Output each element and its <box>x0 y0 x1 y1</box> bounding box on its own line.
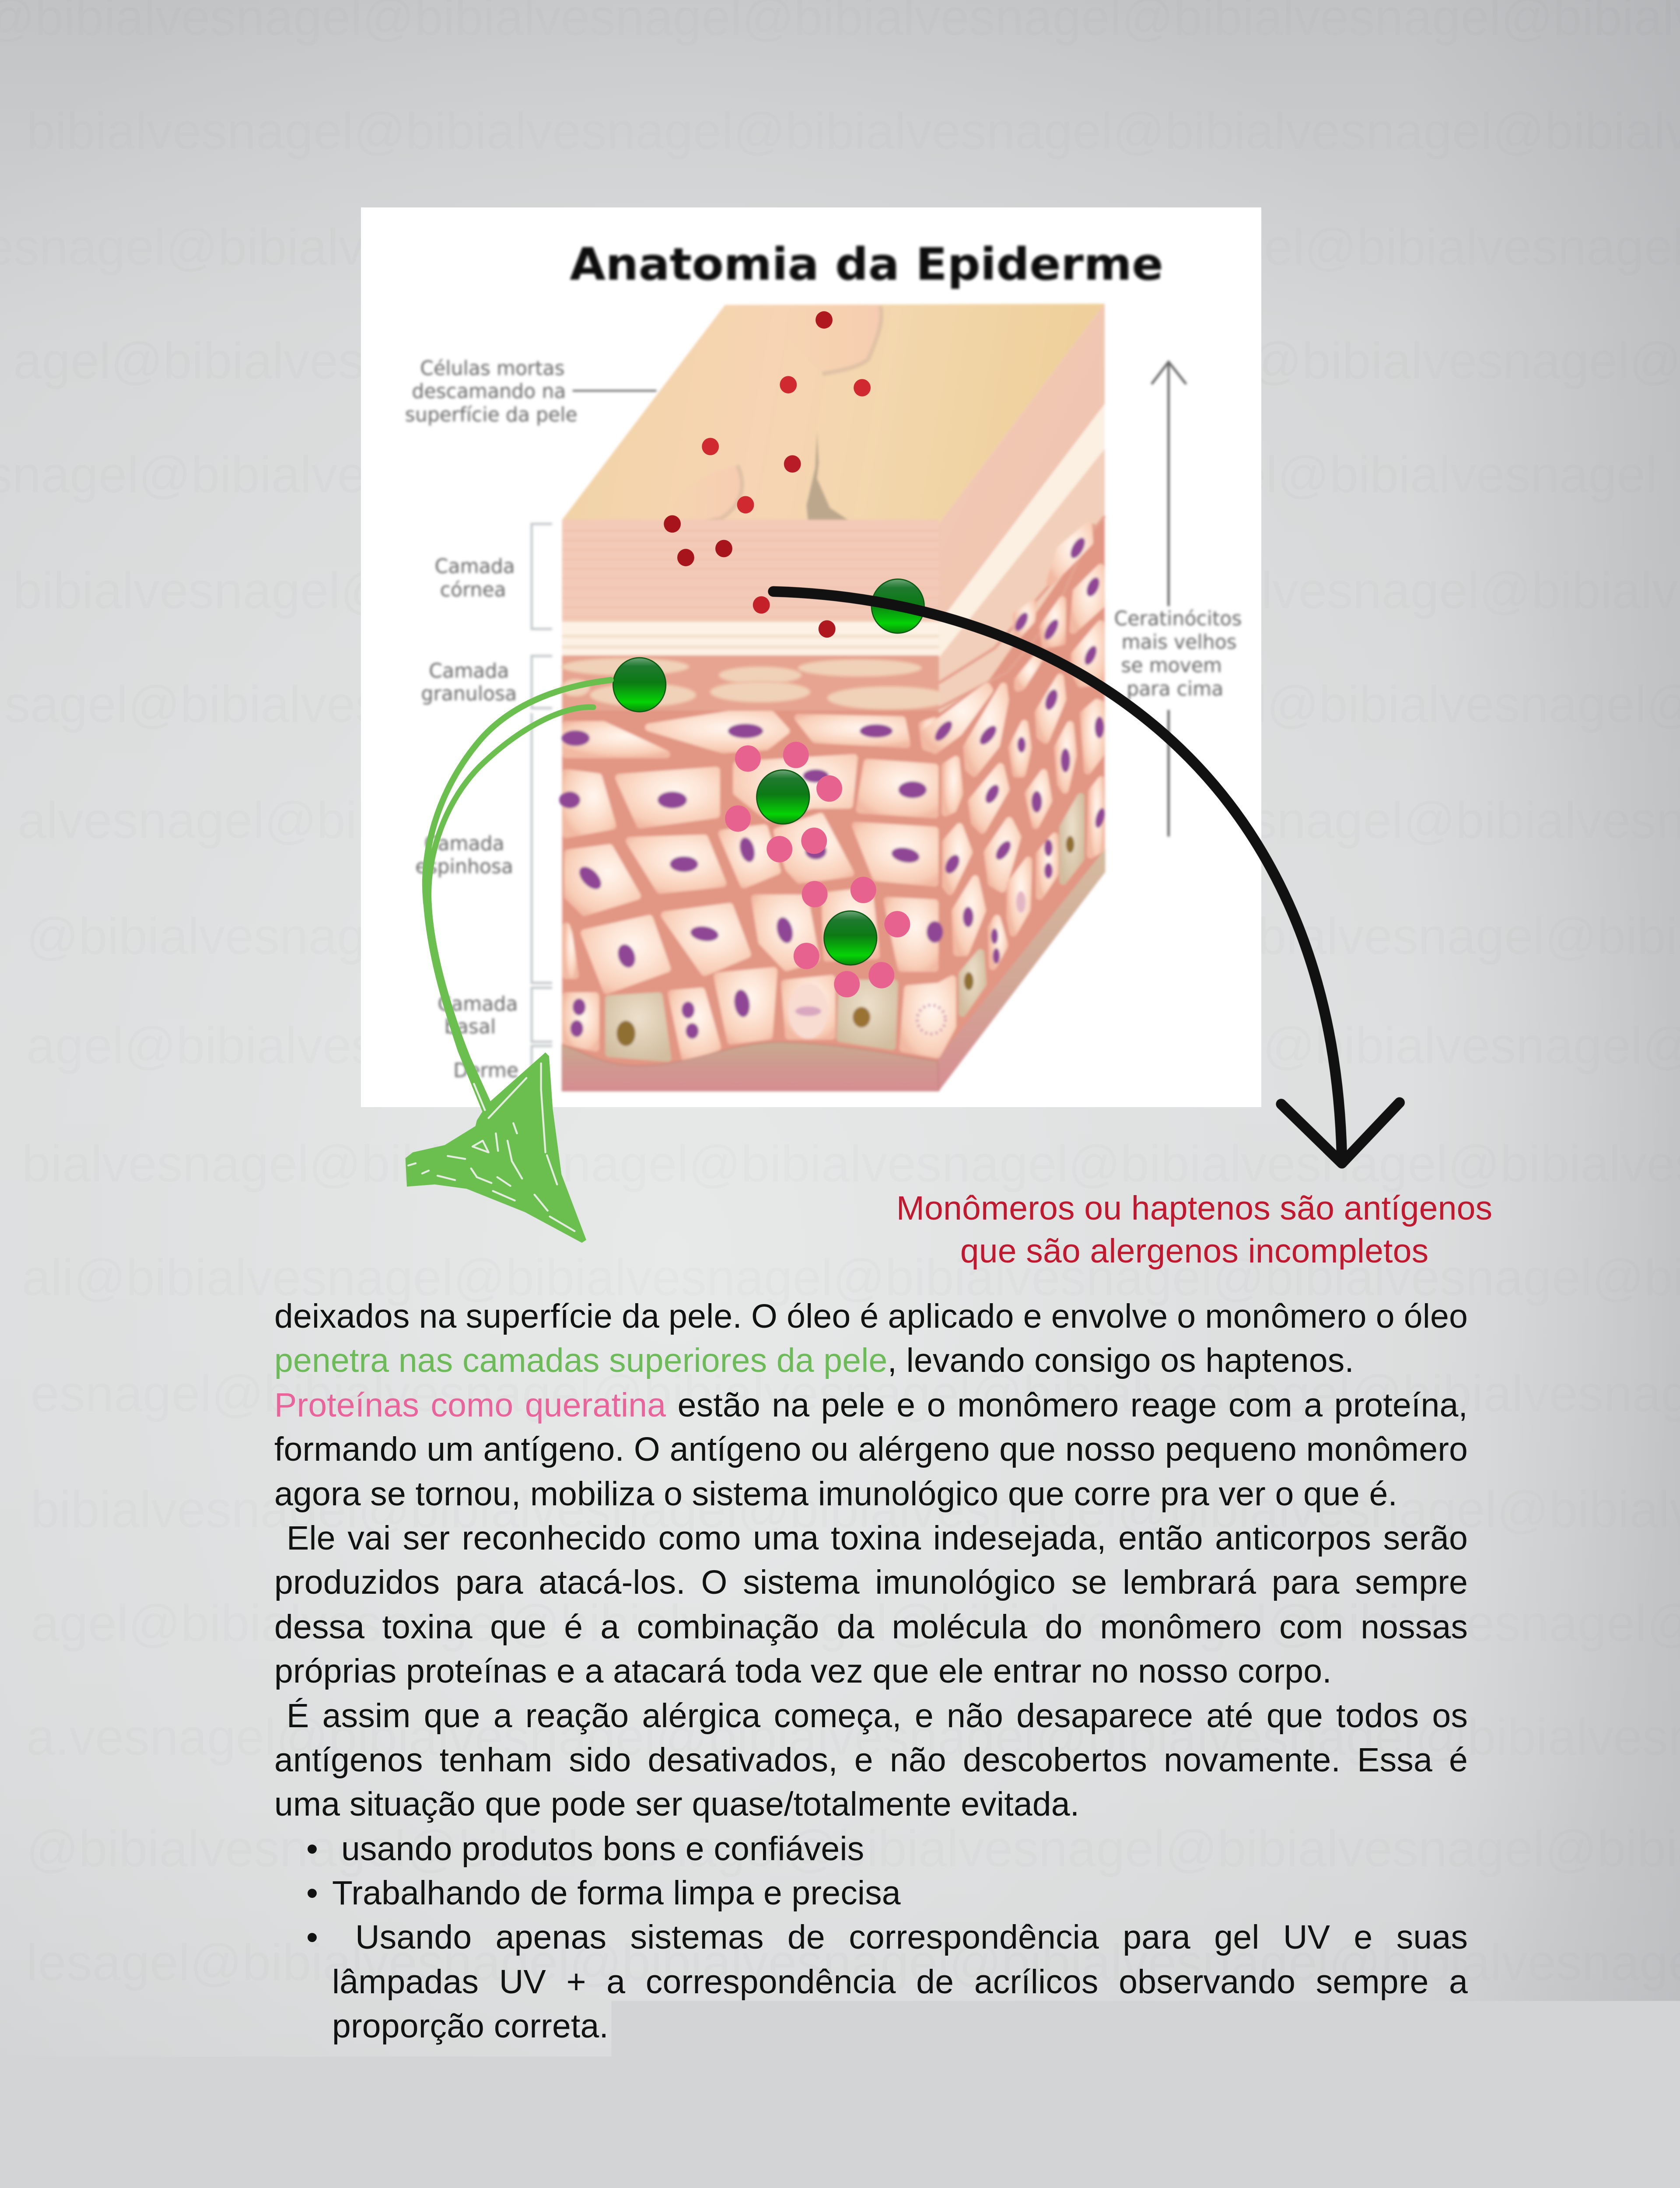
body text: deixados na superfície da pele. O óleo é aplicado e envolve o monômero o óleo <box>274 1297 1468 1335</box>
keratinocyte cells <box>566 526 1101 1058</box>
layer labels: Camada <box>438 992 518 1015</box>
layer labels: Ceratinócitos <box>1114 607 1242 630</box>
layer labels: mais velhos <box>1122 630 1237 654</box>
upward keratinocyte arrow <box>1152 362 1186 837</box>
body text: agora se tornou, mobiliza o sistema imunológico que corre pra ver o que é. <box>274 1475 1397 1513</box>
pink protein dots <box>725 742 910 997</box>
body text: Usando apenas sistemas de correspondência para gel UV e suas <box>355 1918 1468 1956</box>
layer labels: Camada <box>429 659 509 682</box>
layer labels: Camada <box>435 554 515 578</box>
body text: penetra nas camadas superiores da pele, levando consigo os haptenos. <box>274 1342 1354 1379</box>
layer labels: granulosa <box>421 682 517 705</box>
layer labels: Células mortas <box>420 357 565 380</box>
body text: próprias proteínas e a atacará toda vez que ele entrar no nosso corpo. <box>274 1652 1332 1690</box>
red caption <box>831 1187 1558 1273</box>
red caption: que são alergenos incompletos <box>960 1232 1428 1270</box>
body text: produzidos para atacá-los. O sistema imunológico se lembrará para sempre <box>274 1564 1468 1601</box>
watermark pattern: ssnagel@bibialvesnagel@bibialvesnagel@bibialvesnagel@bibialvesnagel <box>0 446 1657 504</box>
label leader line <box>573 390 656 391</box>
right face of skin block <box>938 304 1105 1091</box>
green arrow <box>406 680 611 1243</box>
body text: Trabalhando de forma limpa e precisa <box>332 1874 901 1912</box>
front face of skin block <box>561 520 951 1091</box>
body text: uma situação que pode ser quase/totalmente evitada. <box>274 1785 1079 1823</box>
body text: formando um antígeno. O antígeno ou alérgeno que nosso pequeno monômero <box>274 1431 1468 1468</box>
top surface of skin block <box>562 304 1105 525</box>
green scribbled arrowhead <box>406 1052 586 1243</box>
body text: lâmpadas UV + a correspondência de acrílicos observando sempre a <box>332 1963 1468 2001</box>
body text: • <box>306 1874 318 1912</box>
layer labels: Camada <box>424 832 504 855</box>
title: Anatomia da Epiderme <box>570 238 1163 291</box>
body text: antígenos tenham sido desativados, e não descobertos novamente. Essa é <box>274 1741 1468 1779</box>
red caption: Monômeros ou haptenos são antígenos <box>896 1189 1492 1227</box>
layer labels: Derme <box>453 1059 518 1082</box>
layer labels: espinhosa <box>415 855 513 878</box>
body text: proporção correta. <box>332 2007 609 2045</box>
body text: Proteínas como queratina estão na pele e o monômero reage com a proteína, <box>274 1386 1468 1424</box>
layer labels: superfície da pele <box>405 403 578 426</box>
pigment cells and mitotic detail <box>616 836 1074 1046</box>
green spheres <box>613 579 924 965</box>
body text: usando produtos bons e confiáveis <box>341 1830 864 1868</box>
cell nuclei <box>559 535 1106 1039</box>
layer labels <box>405 357 1242 1082</box>
red monomer dots <box>664 311 871 638</box>
layer labels: córnea <box>440 578 506 601</box>
layer labels: descamando na <box>412 379 566 403</box>
body text: • <box>306 1830 318 1868</box>
layer labels: se movem <box>1121 653 1222 677</box>
layer brackets <box>532 524 552 1091</box>
body text: É assim que a reação alérgica começa, e não desaparece até que todos os <box>287 1697 1468 1735</box>
body text: • <box>306 1918 318 1956</box>
body text: dessa toxina que é a combinação da molécula do monômero com nossas <box>274 1608 1468 1646</box>
layer labels: para cima <box>1127 677 1223 701</box>
body text: Ele vai ser reconhecido como uma toxina indesejada, então anticorpos serão <box>287 1519 1468 1557</box>
black arrow <box>774 592 1400 1163</box>
dermis <box>562 1042 939 1091</box>
layer labels: basal <box>444 1015 496 1038</box>
watermark pattern: esnagel@bibialvesnagel@bibialvesnagel@bibialvesnagel@bibialvesnagel <box>31 1365 1680 1423</box>
body text <box>274 1294 1468 2049</box>
